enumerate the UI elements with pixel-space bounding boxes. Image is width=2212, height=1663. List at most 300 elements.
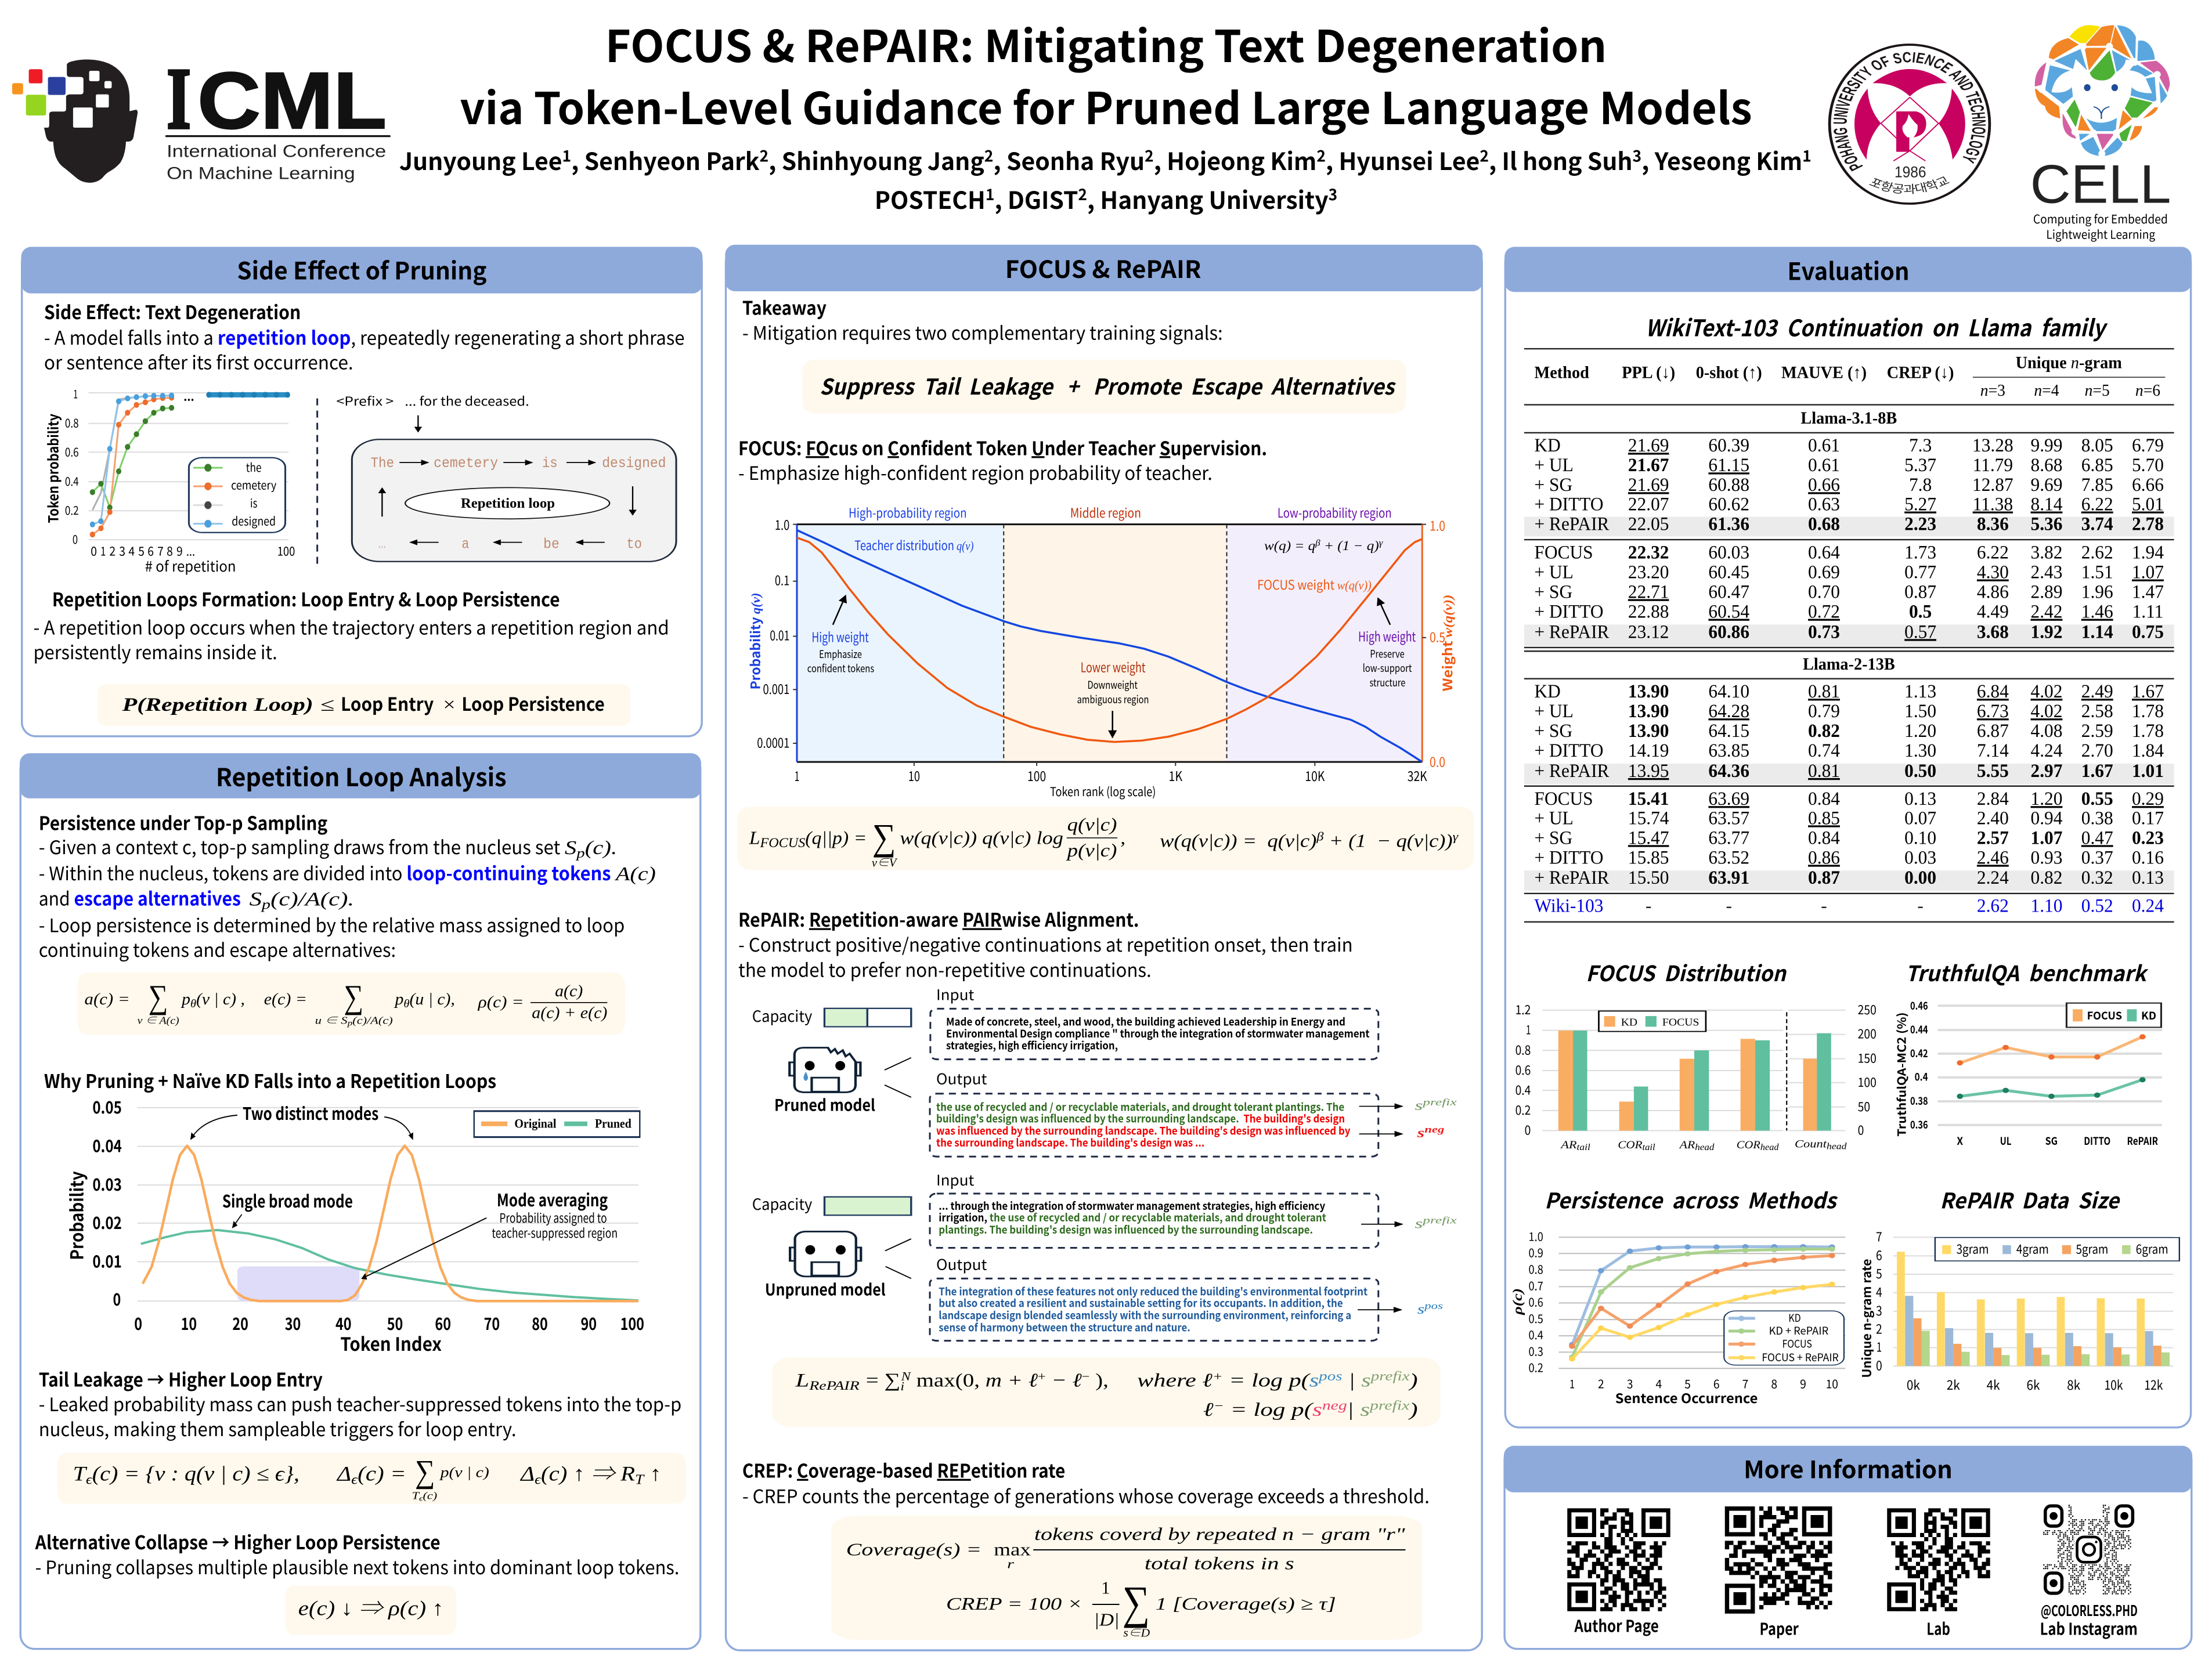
table rows: Llama-3.1-8B: 60.47 (1708, 581, 1749, 602)
diagram: pruned model: Pruned model (774, 1093, 875, 1116)
table rows: Llama-3.1-8B: 2.89 (2031, 581, 2062, 602)
QR captions (1574, 1599, 2138, 1640)
diagram: pruned model (752, 984, 1457, 1156)
line chart: Persistence across Methods: 0.6 (1529, 1293, 1543, 1310)
callout: two signals (802, 360, 1406, 413)
text block: - Pruning collapses multiple plausible next tokens into dominant loop tokens. (35, 1553, 679, 1580)
diagram: repetition loop: a (461, 536, 469, 552)
table rows: Llama-3.1-8B: 1.51 (2081, 562, 2113, 583)
table rows: Llama-2-13B: + UL (1534, 701, 1574, 721)
table rows: Llama-2-13B: 1.07 (2031, 827, 2062, 848)
chart: teacher distribution and FOCUS weight: 0.01 (770, 625, 789, 644)
table rows: Llama-3.1-8B: 0.61 (1808, 455, 1840, 475)
line chart: original vs pruned distribution: 30 (285, 1311, 301, 1335)
prefix text: ... for the deceased. (405, 392, 529, 410)
legend: FOCUS (1782, 1335, 1812, 1351)
text block (39, 1390, 681, 1442)
table rows: Llama-2-13B: 63.57 (1708, 808, 1749, 828)
table rows: Llama-3.1-8B: 1.07 (2132, 562, 2164, 583)
QR captions: Paper (1760, 1616, 1799, 1640)
table rows: Llama-2-13B (1534, 681, 2164, 888)
line chart: original vs pruned distribution: 0.02 (92, 1210, 122, 1234)
formula: escape collapse: e(c) ↓ ⇒ ρ(c) ↑ (298, 1597, 444, 1619)
text block (34, 613, 669, 665)
table header: CREP (↓) (1887, 363, 1954, 382)
diagram: repetition loop (352, 439, 676, 562)
line chart: TruthfulQA benchmark: 0.44 (1910, 1021, 1928, 1037)
table rows: Llama-2-13B: 0.81 (1808, 760, 1840, 781)
bar chart: FOCUS Distribution: head (1695, 1143, 1715, 1152)
table rows: Llama-2-13B: 63.85 (1708, 740, 1749, 761)
table rows: Llama-3.1-8B: 11.38 (1973, 494, 2013, 515)
annotation: single broad mode (222, 1187, 353, 1228)
table header: Method (1534, 363, 1589, 382)
formula: tail leakage: ϵ (351, 1472, 359, 1487)
table rows: Llama-3.1-8B: 0.68 (1808, 514, 1840, 534)
input box: strategies, high efficiency irrigation, (946, 1037, 1118, 1053)
table rows: Llama-2-13B: 4.02 (2031, 681, 2062, 702)
bar chart: FOCUS Distribution: 250 (1858, 1000, 1877, 1018)
table rows: Llama-2-13B: 2.97 (2031, 760, 2062, 781)
line chart: Persistence across Methods: 2 (1598, 1375, 1604, 1392)
chart: teacher distribution and FOCUS weight: Low-probability region (1278, 503, 1392, 522)
table rows: Llama-3.1-8B: + SG (1534, 475, 1572, 495)
formula: a(c), e(c), rho(c): u ∈ S (315, 1015, 335, 1026)
table rows: Llama-2-13B: 5.55 (1977, 760, 2009, 781)
input box (930, 1008, 1379, 1060)
emblem (1854, 69, 1965, 161)
line chart: original vs pruned distribution: 40 (335, 1311, 352, 1335)
formula: tail leakage: ∑ (415, 1454, 435, 1490)
line chart: TruthfulQA benchmark: RePAIR (2127, 1133, 2158, 1148)
bar chart: FOCUS Distribution: head (1827, 1142, 1847, 1152)
table rows: Llama-3.1-8B: 8.05 (2081, 435, 2113, 455)
table rows: Llama-2-13B: 2.49 (2081, 681, 2113, 702)
formula: a(c), e(c), rho(c): a(c) = (85, 989, 130, 1008)
line chart: original vs pruned distribution: 100 (620, 1311, 644, 1335)
line chart: original vs pruned distribution: 80 (532, 1311, 548, 1335)
line chart: TruthfulQA benchmark: DITTO (2084, 1133, 2110, 1148)
bar chart: FOCUS Distribution: FOCUS Distribution (1586, 957, 1787, 988)
formula: RePAIR loss: prefix (1370, 1369, 1410, 1384)
line chart: original vs pruned distribution: Probability (63, 1171, 89, 1260)
legend: FOCUS + RePAIR (1762, 1349, 1839, 1364)
authors: , Yeseong Kim (1641, 142, 1802, 177)
ICML subtitle: International Conference (167, 142, 386, 161)
formula: a(c), e(c), rho(c): a(c) + e(c) (532, 1003, 607, 1022)
CREP description: CREP: Coverage-based REPetition rate (742, 1456, 1065, 1483)
CELL caption (2033, 209, 2168, 243)
bar chart: FOCUS Distribution: 1 (1526, 1020, 1531, 1038)
diagram: unpruned model: Unpruned model (765, 1278, 886, 1300)
diagram: pruned model: Input (936, 984, 974, 1004)
formula: FOCUS loss (737, 807, 1474, 870)
annotation: mode averaging: Probability assigned to (499, 1208, 607, 1227)
table rows: Llama-2-13B: 15.47 (1628, 827, 1669, 848)
table rows: Llama-3.1-8B: 0.63 (1808, 494, 1840, 515)
legend: Original (514, 1118, 557, 1131)
text block: top-p sampling: and escape alternatives (39, 885, 241, 912)
line chart: Persistence across Methods: Persistence across Methods (1545, 1184, 1838, 1215)
title: via Token-Level Guidance for Pruned Large Language Models (460, 74, 1752, 137)
text block: - A repetition loop occurs when the trajectory enters a repetition region and (34, 613, 669, 641)
output box (930, 1278, 1379, 1341)
table rows: Llama-3.1-8B: 22.32 (1628, 542, 1669, 563)
affiliations: POSTECH (875, 181, 987, 216)
panel heading: Side Effect of Pruning (237, 251, 487, 286)
formula: CREP (831, 1516, 1422, 1640)
text block: top-p sampling (39, 833, 656, 963)
logo: POSTECH: 1986 (1895, 163, 1926, 181)
table rows: Llama-3.1-8B: 21.67 (1628, 455, 1669, 475)
table rows: Llama-3.1-8B: FOCUS (1534, 542, 1593, 563)
table rows: Llama-3.1-8B: 2.42 (2031, 601, 2062, 622)
table rows: Llama-3.1-8B: 60.45 (1708, 562, 1749, 583)
panel heading: More Information (1744, 1451, 1953, 1485)
diagram: unpruned model: s (1417, 1302, 1426, 1317)
RePAIR description: the model to prefer non-repetitive continuations. (738, 955, 1152, 982)
CELL wordmark: CELL (2030, 154, 2171, 215)
annotation: two distinct modes (190, 1100, 413, 1140)
annotation: lower weight: ambiguous region (1077, 691, 1149, 707)
table rows: Llama-3.1-8B: 22.88 (1628, 601, 1669, 622)
formula: tail leakage: ϵ (86, 1472, 93, 1487)
bar chart: FOCUS Distribution: AR (1680, 1139, 1700, 1151)
chart legend: cemetery (231, 476, 277, 493)
text block (44, 323, 685, 375)
logo: CELL (2030, 25, 2171, 243)
formula: RePAIR loss: i (900, 1380, 904, 1393)
line chart: token probability: 0.4 (65, 472, 79, 489)
table rows: Llama-2-13B: 4.24 (2031, 740, 2062, 761)
line chart: TruthfulQA benchmark: 0.4 (1915, 1068, 1928, 1084)
annotation: high weight left (807, 595, 874, 675)
logo: ICML (12, 50, 391, 183)
formula: tail leakage: ↑ (644, 1462, 662, 1485)
takeaway: - Mitigation requires two complementary training signals: (742, 318, 1223, 345)
table rows: Llama-3.1-8B: 6.22 (1977, 542, 2009, 563)
formula: tail leakage: Δ (337, 1462, 347, 1485)
panel heading: FOCUS & RePAIR (1005, 250, 1201, 285)
line chart: Persistence across Methods: ρ(c) (1511, 1288, 1525, 1315)
formula: RePAIR loss: max(0, (911, 1370, 986, 1391)
formula: CREP: ∑ (1123, 1577, 1150, 1628)
formula: repetition probability: × (443, 694, 456, 715)
line chart: token probability: 100 (277, 541, 295, 559)
authors: 3 (1633, 143, 1641, 166)
ICML wordmark: CML (197, 56, 387, 146)
chart: teacher distribution and FOCUS weight: 0.0001 (757, 732, 789, 751)
affiliations: 3 (1329, 182, 1337, 205)
formula: CREP: 1 [Coverage(s) ≥ τ] (1156, 1594, 1336, 1614)
chart: teacher distribution and FOCUS weight: FOCUS weight w(q(v)) (1257, 575, 1372, 594)
table rows: Llama-3.1-8B (1534, 435, 2164, 642)
icon: colourful sheep (2034, 25, 2170, 157)
formula: a(c), e(c), rho(c): θ (190, 997, 196, 1010)
bar chart: FOCUS Distribution: head (1760, 1143, 1779, 1152)
table rows: Llama-2-13B: 0.03 (1904, 847, 1936, 868)
annotation: high weight right (1358, 598, 1416, 690)
line chart: token probability: 1 (73, 385, 78, 402)
chart: teacher distribution and FOCUS weight: 100 (1027, 766, 1046, 785)
bar chart: RePAIR Data Size: 10k (2104, 1375, 2123, 1394)
table rows: Llama-3.1-8B: 0.66 (1808, 475, 1840, 495)
formula: repetition probability: P(Repetition Loop) (122, 694, 313, 715)
bar chart: RePAIR Data Size: 2k (1947, 1375, 1960, 1394)
annotation: lower weight: Lower weight (1081, 657, 1146, 676)
table rows: Llama-2-13B: 0.17 (2132, 808, 2164, 828)
bar chart: FOCUS Distribution: Count (1795, 1138, 1836, 1150)
authors: 2 (759, 143, 768, 166)
chart: teacher distribution and FOCUS weight: 0.1 (775, 570, 789, 589)
input box: ... through the integration of stormwater management strategies, high efficiency (939, 1198, 1325, 1213)
table rows: Llama-3.1-8B: 9.99 (2031, 435, 2062, 455)
legend: FOCUS (2087, 1007, 2122, 1023)
formula: FOCUS loss: w(q(v|c)) q(v|c) log (900, 828, 1063, 848)
text block: top-p sampling: S (250, 888, 257, 910)
authors: 2 (1316, 143, 1326, 166)
authors: , Senhyeon Park (571, 142, 760, 177)
line chart: original vs pruned distribution: 10 (181, 1311, 197, 1335)
diagram: repetition loop: Repetition loop (461, 496, 555, 511)
table rows: Llama-2-13B: 6.87 (1977, 721, 2009, 741)
bar chart: RePAIR Data Size: 3 (1876, 1301, 1882, 1319)
annotation: mode averaging: teacher-suppressed region (492, 1223, 618, 1241)
formula: RePAIR loss: ℓ (1203, 1399, 1215, 1420)
diagram: pruned model: s (1417, 1125, 1426, 1141)
table rows: Llama-2-13B: 63.52 (1708, 847, 1749, 868)
icon: ICML coloured blocks (12, 69, 66, 115)
table rows: Llama-3.1-8B: 60.39 (1708, 435, 1749, 455)
chart: teacher distribution and FOCUS weight: High-probability region (849, 503, 967, 522)
diagram: unpruned model: Capacity (752, 1192, 812, 1214)
table rows: Llama-2-13B: 1.84 (2132, 740, 2164, 761)
logo: POSTECH: 포항공과대학교 (1869, 176, 1950, 194)
table rows: Llama-3.1-8B: + DITTO (1534, 601, 1604, 622)
legend: 3gram (1957, 1239, 1989, 1257)
formula: RePAIR loss: RePAIR (809, 1378, 860, 1393)
output box: was influenced by the surrounding landscape. The building's design was influenced by (936, 1122, 1350, 1138)
table rows: Llama-2-13B: 0.29 (2132, 789, 2164, 809)
icon: QR code lab (1887, 1508, 1990, 1611)
bar chart: FOCUS Distribution: 0 (1525, 1120, 1531, 1138)
table rows: Llama-3.1-8B: 12.87 (1972, 475, 2013, 495)
formula: CREP: r (1007, 1557, 1015, 1571)
formula: tail leakage (57, 1453, 686, 1503)
annotation: mode averaging (362, 1186, 618, 1278)
table row: Wiki-103: - (1646, 895, 1651, 916)
FOCUS description: - Emphasize high-confident region probability of teacher. (738, 458, 1213, 486)
line chart: token probability: 1 (100, 541, 106, 559)
table rows: Llama-2-13B: 0.13 (2132, 867, 2164, 888)
FOCUS description (738, 433, 1267, 486)
output box: The integration of these features not only reduced the building's environmental footprint (939, 1283, 1367, 1299)
output box: the surrounding landscape. The building's design was ... (936, 1134, 1204, 1150)
line chart: original vs pruned distribution: 0.05 (92, 1094, 122, 1119)
CELL caption: Lightweight Learning (2046, 225, 2156, 243)
panel: Side Effect of Pruning (21, 247, 702, 736)
table rows: Llama-2-13B: 0.94 (2031, 808, 2062, 828)
table rows: Llama-3.1-8B: 5.36 (2031, 514, 2062, 534)
table rows: Llama-3.1-8B: 0.72 (1808, 601, 1840, 622)
line chart: token probability: 2 (109, 541, 116, 559)
table rows: Llama-3.1-8B: 9.69 (2031, 475, 2062, 495)
formula: a(c), e(c), rho(c): p (347, 1018, 352, 1028)
panel heading: Evaluation (1787, 252, 1910, 287)
line chart: Persistence across Methods: 10 (1826, 1375, 1838, 1392)
table rows: Llama-2-13B: FOCUS (1534, 789, 1593, 809)
upper body (737, 294, 1474, 870)
authors: 2 (1480, 143, 1489, 166)
table rows: Llama-2-13B: 13.90 (1628, 721, 1669, 741)
line chart: token probability: Token probability (42, 414, 62, 523)
output box: The building's design (1243, 1110, 1345, 1126)
formula: RePAIR loss: = log p( (1223, 1370, 1311, 1391)
subheading: Why Pruning + Naïve KD Falls into a Repetition Loops (44, 1067, 496, 1094)
annotation: mode averaging: Mode averaging (497, 1186, 608, 1212)
line chart: token probability: 3 (119, 541, 125, 559)
table rows: Llama-3.1-8B: 60.62 (1708, 494, 1749, 515)
table rows: Llama-3.1-8B: 0.77 (1904, 562, 1936, 583)
legend: 6gram (2136, 1239, 2168, 1257)
table rows: Llama-2-13B: + DITTO (1534, 740, 1604, 761)
formula: RePAIR loss: where ℓ (1137, 1370, 1225, 1391)
table rows: Llama-2-13B: 2.46 (1977, 847, 2009, 868)
arrow: prefix into loop (417, 415, 419, 432)
legend (1935, 1238, 2179, 1261)
formula: RePAIR loss: | (1347, 1399, 1360, 1420)
table rows: Llama-2-13B: 64.36 (1708, 760, 1749, 781)
line chart: Persistence across Methods: 0.5 (1529, 1310, 1543, 1326)
chart: teacher distribution and FOCUS weight: 1.0 (775, 514, 789, 533)
formula: RePAIR loss: − ℓ (1051, 1370, 1082, 1391)
table rows: Llama-3.1-8B: 61.15 (1708, 455, 1749, 475)
formula: a(c), e(c), rho(c) (77, 973, 625, 1035)
formula: RePAIR loss: = ∑ (866, 1370, 910, 1391)
line chart: original vs pruned distribution: 20 (232, 1311, 248, 1335)
output box: the use of recycled and / or recyclable materials, and drought tolerant plantings. The (936, 1098, 1344, 1114)
line chart: Persistence across Methods: 6 (1713, 1375, 1720, 1392)
chart: teacher distribution and FOCUS weight: 0.001 (763, 679, 789, 698)
table rows: Llama-3.1-8B: 2.78 (2132, 514, 2164, 534)
prefix text: <Prefix > (337, 392, 394, 410)
table rows: Llama-2-13B: 6.84 (1977, 681, 2009, 702)
chart: teacher distribution and FOCUS weight: 0.0 (1430, 751, 1445, 771)
table rows: Llama-3.1-8B: 5.70 (2132, 455, 2164, 475)
formula: RePAIR loss: s (1360, 1399, 1370, 1420)
bar chart: RePAIR Data Size (1858, 1184, 2179, 1394)
authors: , Il hong Suh (1489, 142, 1633, 177)
table header (1534, 353, 2160, 400)
formula: repetition probability: Loop Persistence (461, 689, 605, 716)
bar chart: FOCUS Distribution: 150 (1858, 1049, 1877, 1067)
table rows: Llama-3.1-8B: + SG (1534, 581, 1572, 602)
affiliations: , Hanyang University (1087, 181, 1329, 216)
table rows: Llama-3.1-8B: 60.03 (1708, 542, 1749, 563)
table rows: Llama-3.1-8B: 13.28 (1972, 435, 2013, 455)
annotation: single broad mode: Single broad mode (222, 1187, 353, 1213)
line chart: Persistence across Methods (1511, 1184, 1845, 1407)
table section label: Llama-3.1-8B (1800, 409, 1897, 428)
table rows: Llama-2-13B: 0.16 (2132, 847, 2164, 868)
annotation: high weight left: Emphasize (819, 646, 862, 661)
bar chart: FOCUS Distribution: tail (1643, 1143, 1655, 1152)
takeaway (742, 294, 1223, 345)
table rows: Llama-2-13B: 2.40 (1977, 808, 2009, 828)
line chart: Persistence across Methods: 0.2 (1529, 1359, 1543, 1376)
formula: RePAIR loss: + (1038, 1370, 1046, 1383)
table rows: Llama-2-13B: 2.24 (1977, 867, 2009, 888)
subheading: Repetition Loops Formation: Loop Entry & Loop Persistence (52, 585, 560, 612)
table rows: Llama-2-13B: 0.32 (2081, 867, 2113, 888)
line chart: token probability: 0 (73, 530, 78, 547)
panel: More Information (1504, 1446, 2192, 1649)
table rows: Llama-3.1-8B: 22.07 (1628, 494, 1669, 515)
line chart: original vs pruned distribution: 0.01 (92, 1249, 122, 1272)
table rows: Llama-3.1-8B: 7.8 (1909, 475, 1932, 495)
formula: FOCUS loss: + (1 − q(v|c)) (1323, 831, 1453, 851)
table rows: Llama-2-13B: 2.57 (1977, 827, 2009, 848)
table rows: Llama-3.1-8B: 6.85 (2081, 455, 2113, 475)
formula: a(c), e(c), rho(c): (v | c) , (196, 989, 245, 1008)
table rows: Llama-3.1-8B: 23.12 (1628, 621, 1669, 642)
line chart: original vs pruned distribution: Token Index (340, 1330, 442, 1357)
table rows: Llama-2-13B: 1.78 (2132, 721, 2164, 741)
shaded teacher-suppressed region (237, 1267, 359, 1301)
line chart: TruthfulQA benchmark: X (1957, 1133, 1963, 1148)
formula: RePAIR loss: − (1214, 1399, 1224, 1412)
text block: top-p sampling: p (260, 896, 270, 912)
diagram: repetition loop: designed (602, 455, 666, 472)
table rows: Llama-2-13B: 1.67 (2132, 681, 2164, 702)
formula: a(c), e(c), rho(c): e(c) = (264, 989, 307, 1008)
table header: Unique n-gram (2016, 353, 2122, 372)
table rows: Llama-2-13B: 63.77 (1708, 827, 1749, 848)
line chart: token probability: 0.8 (65, 414, 79, 431)
annotation: high weight left: confident tokens (807, 660, 874, 675)
table rows: Llama-2-13B: 4.02 (2031, 701, 2062, 721)
line chart: TruthfulQA benchmark: 0.36 (1910, 1116, 1928, 1131)
line chart: token probability: 5 (138, 541, 145, 559)
diagram: unpruned model: Output (936, 1253, 987, 1274)
output box: landscape design blended seamlessly with the surrounding environment, reinforcing a (939, 1307, 1351, 1322)
table rows: Llama-2-13B: + RePAIR (1534, 867, 1610, 888)
formula: RePAIR loss: + (1213, 1370, 1223, 1383)
bar chart: RePAIR Data Size: 0 (1876, 1355, 1882, 1374)
bar chart: FOCUS Distribution: 100 (1858, 1072, 1877, 1090)
table rows: Llama-3.1-8B: 3.68 (1977, 621, 2009, 642)
table rows: Llama-2-13B: 13.90 (1628, 681, 1669, 702)
line chart: token probability: 0.6 (65, 443, 79, 460)
bar chart: FOCUS Distribution: 0.2 (1515, 1100, 1531, 1118)
table rows: Llama-2-13B: 2.59 (2081, 721, 2113, 741)
formula: a(c), e(c), rho(c): p (395, 989, 402, 1008)
formula: tail leakage: (c) = {v : q(v | c) ≤ ϵ}, (92, 1462, 299, 1485)
output box: building's design was influenced by the surrounding landscape. (936, 1110, 1239, 1126)
text block: top-p sampling: (c). (585, 837, 617, 859)
panel: FOCUS & RePAIR (725, 245, 1482, 1650)
title (460, 12, 1752, 137)
QR captions: Lab (1926, 1616, 1950, 1640)
line chart: Persistence across Methods: Sentence Occurrence (1615, 1389, 1758, 1407)
table rows: Llama-2-13B: 1.67 (2081, 760, 2113, 781)
diagram: pruned model: neg (1424, 1124, 1445, 1135)
table rows: Llama-3.1-8B: 60.86 (1708, 621, 1749, 642)
subheading: Side Effect: Text Degeneration (44, 298, 301, 325)
formula: CREP: Coverage(s) = (846, 1539, 981, 1559)
table rows: Llama-2-13B: 1.78 (2132, 701, 2164, 721)
formula: FOCUS loss: FOCUS (760, 836, 805, 851)
